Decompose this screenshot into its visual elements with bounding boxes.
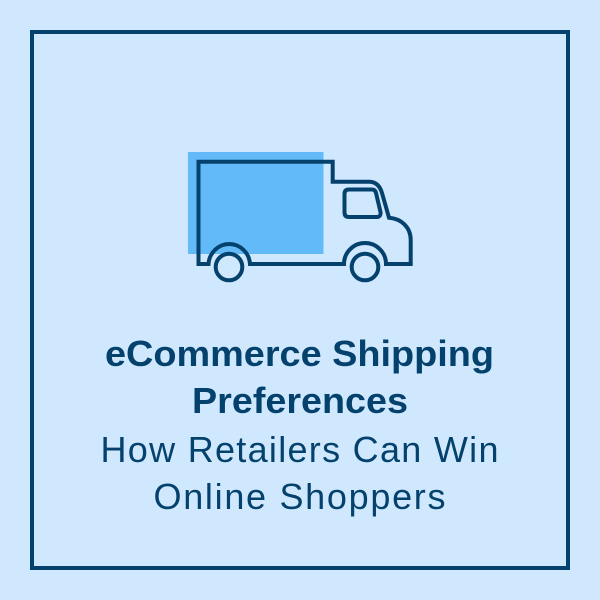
truck body outline: [198, 162, 411, 264]
title line 2: Preferences: [192, 380, 408, 421]
title: [105, 333, 494, 421]
icon: delivery truck: [188, 152, 411, 280]
title line 1: eCommerce Shipping: [105, 333, 494, 374]
front wheel: [352, 254, 378, 280]
rear wheel: [216, 254, 242, 280]
frame border: [32, 32, 568, 568]
truck window: [344, 190, 381, 217]
subtitle line 1: How Retailers Can Win: [100, 429, 498, 470]
subtitle line 2: Online Shoppers: [154, 476, 446, 517]
subtitle: [100, 429, 498, 517]
truck cargo highlight block: [188, 152, 324, 254]
